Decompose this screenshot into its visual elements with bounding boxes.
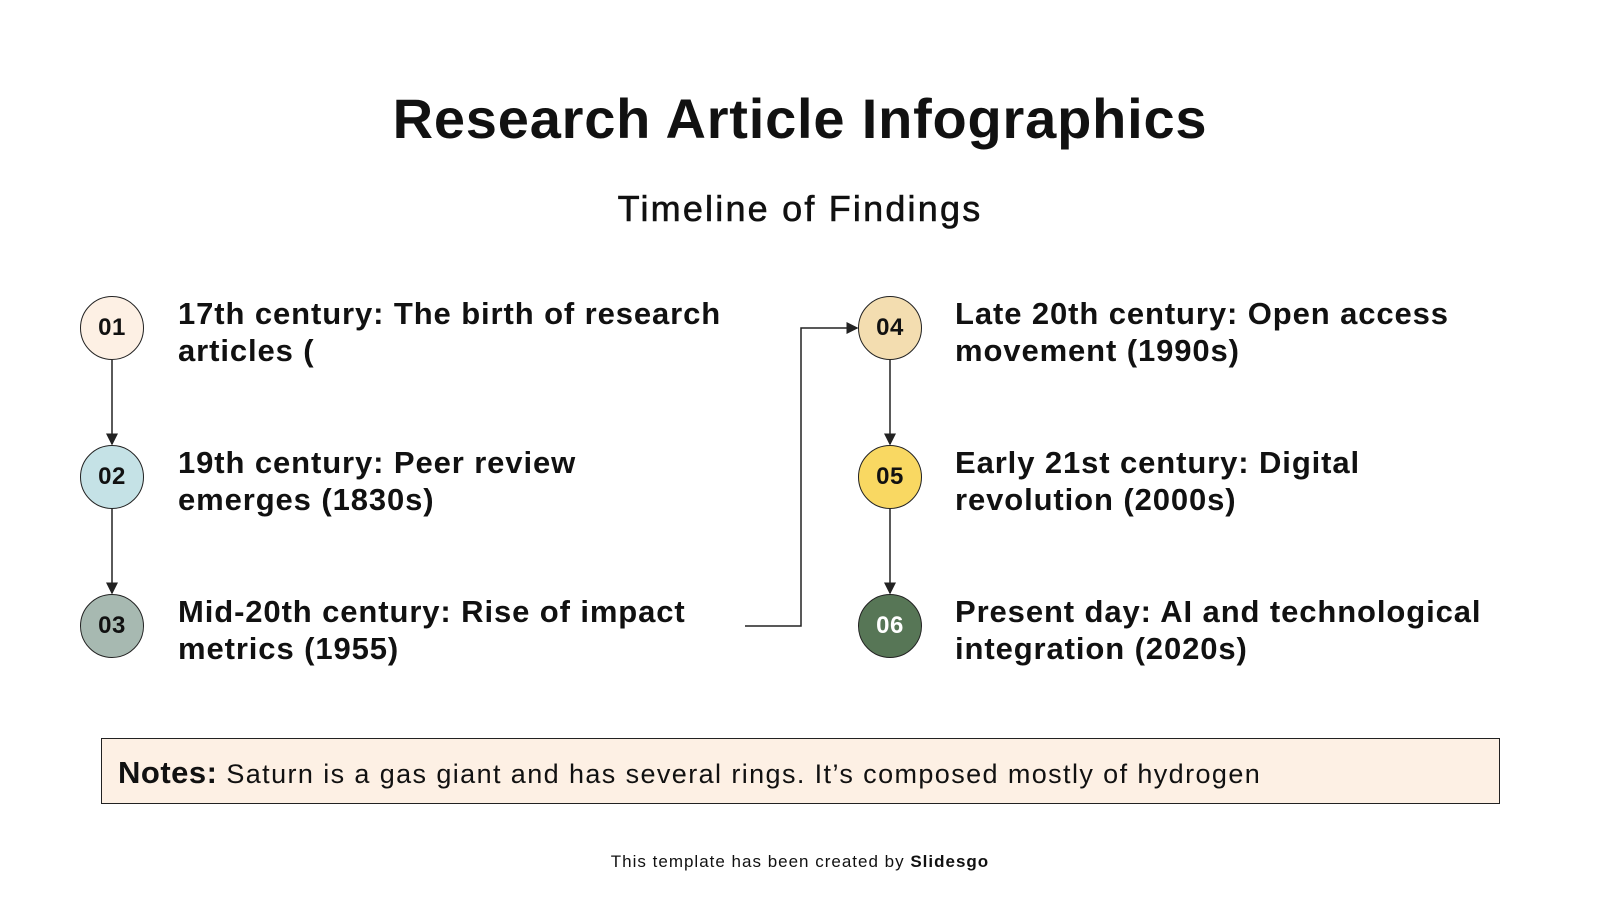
item 04: movement (1990s) (955, 333, 1240, 368)
item 05: Early 21st century: Digital (955, 445, 1360, 480)
item 05 (858, 445, 1360, 517)
item 01 (80, 296, 721, 368)
item 01: articles ( (178, 333, 315, 368)
item 01: 01 (98, 314, 126, 341)
item 06: Present day: AI and technological (955, 594, 1481, 629)
item 06: integration (2020s) (955, 631, 1248, 666)
title: Research Article Infographics (393, 87, 1207, 150)
item 04: Late 20th century: Open access (955, 296, 1449, 331)
item 03: 03 (98, 612, 126, 639)
item 05: revolution (2000s) (955, 482, 1237, 517)
item 02 (80, 445, 576, 517)
notes box (101, 738, 1500, 804)
item 01: 17th century: The birth of research (178, 296, 721, 331)
item 06: 06 (876, 612, 904, 639)
subtitle: Timeline of Findings (618, 188, 982, 229)
item 03: Mid-20th century: Rise of impact (178, 594, 686, 629)
item 02: emerges (1830s) (178, 482, 434, 517)
footer: This template has been created by Slidesgo (611, 852, 989, 871)
item 04 (858, 296, 1449, 368)
notes box: Notes: Saturn is a gas giant and has several rings. It’s composed mostly of hydrogen (118, 755, 1261, 790)
item 03 (80, 594, 686, 666)
item 02: 19th century: Peer review (178, 445, 576, 480)
item 06 (858, 594, 1481, 666)
item 05: 05 (876, 463, 904, 490)
item 03: metrics (1955) (178, 631, 399, 666)
item 04: 04 (876, 314, 904, 341)
item 02: 02 (98, 463, 126, 490)
